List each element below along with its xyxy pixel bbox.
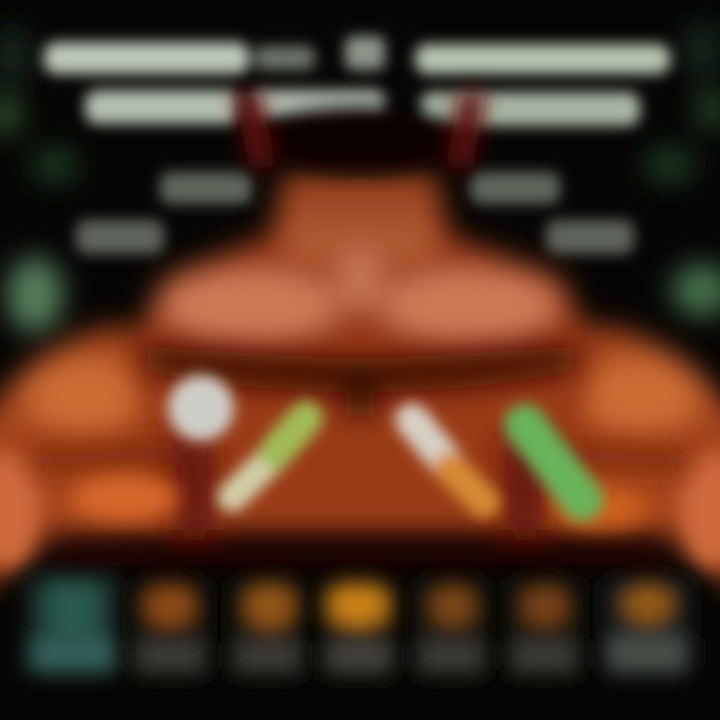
card 4 (320, 578, 398, 678)
red horn right (446, 92, 486, 170)
label: upper right (470, 172, 560, 204)
background green blotches (0, 20, 720, 333)
torso (130, 170, 595, 540)
title (44, 36, 670, 126)
forearm highlights (71, 476, 648, 528)
icon: green and white capsule (232, 418, 306, 497)
card 3 (228, 578, 306, 678)
icon: green capsule (525, 425, 582, 500)
label: upper left (160, 172, 252, 204)
muscular figure (0, 170, 720, 600)
icon: white ball (168, 375, 234, 441)
card 6 (505, 578, 583, 678)
icon: white and orange capsule (412, 420, 484, 502)
card row (28, 575, 692, 678)
outer forearms (0, 452, 720, 568)
card 7 (602, 578, 692, 676)
arms (0, 325, 720, 600)
card 2 (130, 578, 210, 678)
card 5 (412, 578, 490, 678)
card 1 (28, 575, 118, 675)
muscle shadows (30, 345, 690, 566)
head shadow (260, 108, 460, 172)
label: lower left (76, 220, 164, 254)
label: lower right (546, 220, 634, 254)
red horn left (234, 92, 276, 170)
